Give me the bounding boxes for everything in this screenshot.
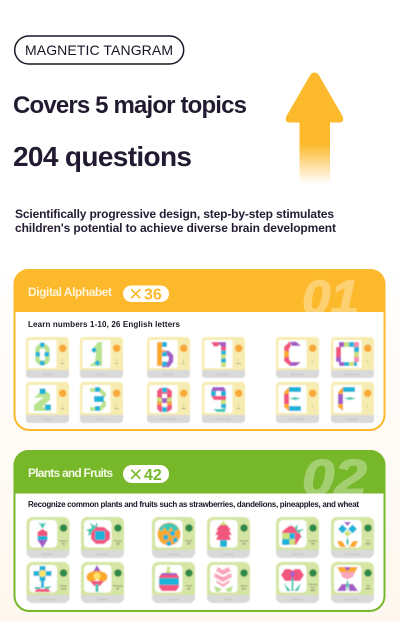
card: number 1: 1 (116, 360, 117, 362)
card: number 6 (147, 337, 190, 378)
card: number 9 (202, 382, 245, 423)
card: red hexagon flower: 虎皮兰 (310, 589, 316, 592)
text block: design description: children's potential to achieve diverse brain development (15, 221, 336, 235)
card: number 9: Four Two Two Six (216, 418, 231, 421)
card: strawberry house (276, 517, 319, 558)
card: number 7: One Two Six (218, 374, 228, 376)
card: flower: Sunflower (60, 584, 68, 588)
card: red barrel fruit: 南瓜 (187, 588, 191, 590)
card: strawberry tree: Snake plant (240, 540, 249, 542)
large number 02: 02 (302, 449, 367, 506)
card: orange flower: 牵牛 (116, 588, 120, 590)
large number 01: 01 (302, 272, 359, 325)
card: strawberry house: Strawberry (309, 540, 317, 542)
badge: Magnetic Tangram (15, 36, 184, 64)
card: number 1: One Two (97, 374, 105, 376)
card: watermelon globe (152, 517, 195, 558)
card: number 9: Nine (237, 408, 240, 410)
card: blue diamond flower: 鸢尾花 (365, 542, 371, 546)
card: number 0: 0 (62, 360, 63, 362)
card: number 3: Two One (97, 419, 105, 421)
card: letter C: C (312, 361, 314, 363)
card: pineapple: Two One Six (97, 554, 107, 556)
card: number 2 (26, 382, 69, 423)
card: red hexagon flower: Two One Six (292, 599, 302, 601)
card: pink chevron plant (207, 562, 250, 603)
card: letter O: One Six One One (345, 374, 359, 376)
card: orange flower: One Two Six (97, 599, 107, 601)
card: red hexagon flower: Flower (310, 586, 316, 589)
panel header: plants and fruits (14, 450, 386, 494)
card: number 3: 3 (116, 405, 117, 407)
panel: plants and fruits (14, 449, 386, 611)
card: number 0 (26, 337, 69, 378)
heading: covers 5 major topics: Covers 5 major topics (13, 92, 247, 119)
card: orange flower (81, 562, 124, 603)
card: pineapple: 菠萝 (116, 542, 120, 546)
card: radish: Two One Six (42, 554, 53, 556)
card: number 8: 8 (183, 405, 184, 407)
card: number 8: One Two Six Six One (159, 419, 177, 421)
card: letter O (331, 337, 374, 378)
count badge x42 (123, 461, 169, 487)
heading: plants and fruits: Plants and Fruits (28, 466, 113, 480)
card: number 6: One Two Six (163, 374, 173, 376)
card: number 9: 9 (238, 405, 239, 407)
card: red hexagon flower (276, 562, 319, 603)
card: number 0: Zero (61, 362, 64, 365)
card: pink chevron plant: One Six (225, 599, 231, 601)
card: letter E: One Two One Six (290, 419, 304, 421)
card: pink chevron plant: 风信子 (241, 588, 247, 590)
card: number 2: Two (61, 408, 64, 410)
subheading: plants and fruits description: Recognize common plants and fruits such as strawberries, dandelions, pineapples, and wheat (28, 500, 359, 509)
heading: digital alphabet: Digital Alphabet (28, 285, 112, 299)
subheading: numbers and letters: Learn numbers 1-10, 26 English letters (28, 320, 181, 329)
card: number 8 (147, 382, 190, 423)
card: letter F: One Four Six (346, 418, 358, 421)
card: pineapple: Pineapple (114, 540, 122, 542)
card: number 6: Six (182, 363, 185, 365)
card: letter E (276, 382, 319, 423)
card: pink chevron plant: Hyacinth (241, 584, 247, 588)
card: watermelon globe: Two Six One (168, 554, 178, 556)
card: number 7 (202, 337, 245, 378)
card: number 3 (80, 382, 123, 423)
card: letter E: E (312, 406, 314, 408)
card: number 7: 7 (238, 360, 239, 362)
card: pineapple (81, 517, 124, 558)
panel header: digital alphabet (14, 269, 386, 312)
card: strawberry tree: 虎尾 (242, 542, 246, 546)
card: red barrel fruit: One Six One (168, 599, 178, 601)
card: red hexagon flower: Snake plant (309, 583, 318, 586)
card: radish (26, 517, 70, 558)
heading: 204 questions: 204 questions (13, 141, 192, 172)
card: number 3: Three (114, 407, 119, 410)
card: letter F: F (367, 406, 368, 408)
card: strawberry house: Two One Six (292, 554, 302, 556)
card: strawberry house: 草莓 (311, 542, 315, 546)
card: red barrel fruit: Pumpkin (186, 586, 192, 588)
card: strawberry tree: Two One Six (223, 554, 233, 556)
count badge x42: × (129, 461, 142, 487)
card: watermelon globe: Tangerine (185, 540, 193, 542)
card: number 8: Eight (182, 407, 186, 410)
count badge x42: 42 (144, 467, 162, 484)
card: flower (26, 562, 70, 603)
card: letter C (276, 337, 319, 378)
card: letter O: O (367, 361, 369, 363)
card: strawberry tree (207, 517, 250, 558)
card: number 6: 6 (183, 360, 184, 362)
card: number 2: Two One (43, 419, 51, 421)
card: red barrel fruit (152, 562, 195, 603)
text block: design description (15, 207, 336, 235)
count badge x36: 36 (144, 286, 162, 304)
card: number 2: 2 (62, 405, 63, 407)
icon: upward arrow (286, 72, 343, 184)
card: number 7: Seven (236, 363, 241, 365)
card: number 0: Zero One (43, 373, 51, 376)
panel: digital alphabet (14, 269, 386, 430)
card: number 1 (80, 337, 123, 378)
card: watermelon globe: 橘子 (187, 542, 191, 546)
card: flower: Two One Six One (40, 599, 55, 601)
card: tulip: 郁金香 (365, 588, 371, 590)
card: letter C: Four Two One (291, 373, 303, 376)
card: flower: 向日葵 (61, 588, 66, 590)
card: blue diamond flower: Two One Six Six (345, 554, 359, 556)
card: radish: 树莓 (62, 542, 65, 546)
card: tulip (331, 562, 374, 603)
card: letter F (331, 382, 374, 423)
card: number 1: One (115, 363, 118, 365)
card: tulip: Tulip (366, 586, 370, 588)
text block: design description: Scientifically progressive design, step-by-step stimulates (15, 207, 334, 221)
count badge x36 (123, 280, 169, 306)
card: orange flower: Morning glory (113, 584, 123, 588)
card: blue diamond flower: Iris (367, 540, 369, 542)
count badge x36: × (129, 280, 142, 306)
card: tulip: One Six Two Six (345, 599, 359, 601)
badge: Magnetic Tangram: MAGNETIC TANGRAM (25, 42, 173, 58)
card: radish: Raspberry (60, 540, 68, 542)
card: blue diamond flower (331, 517, 374, 558)
